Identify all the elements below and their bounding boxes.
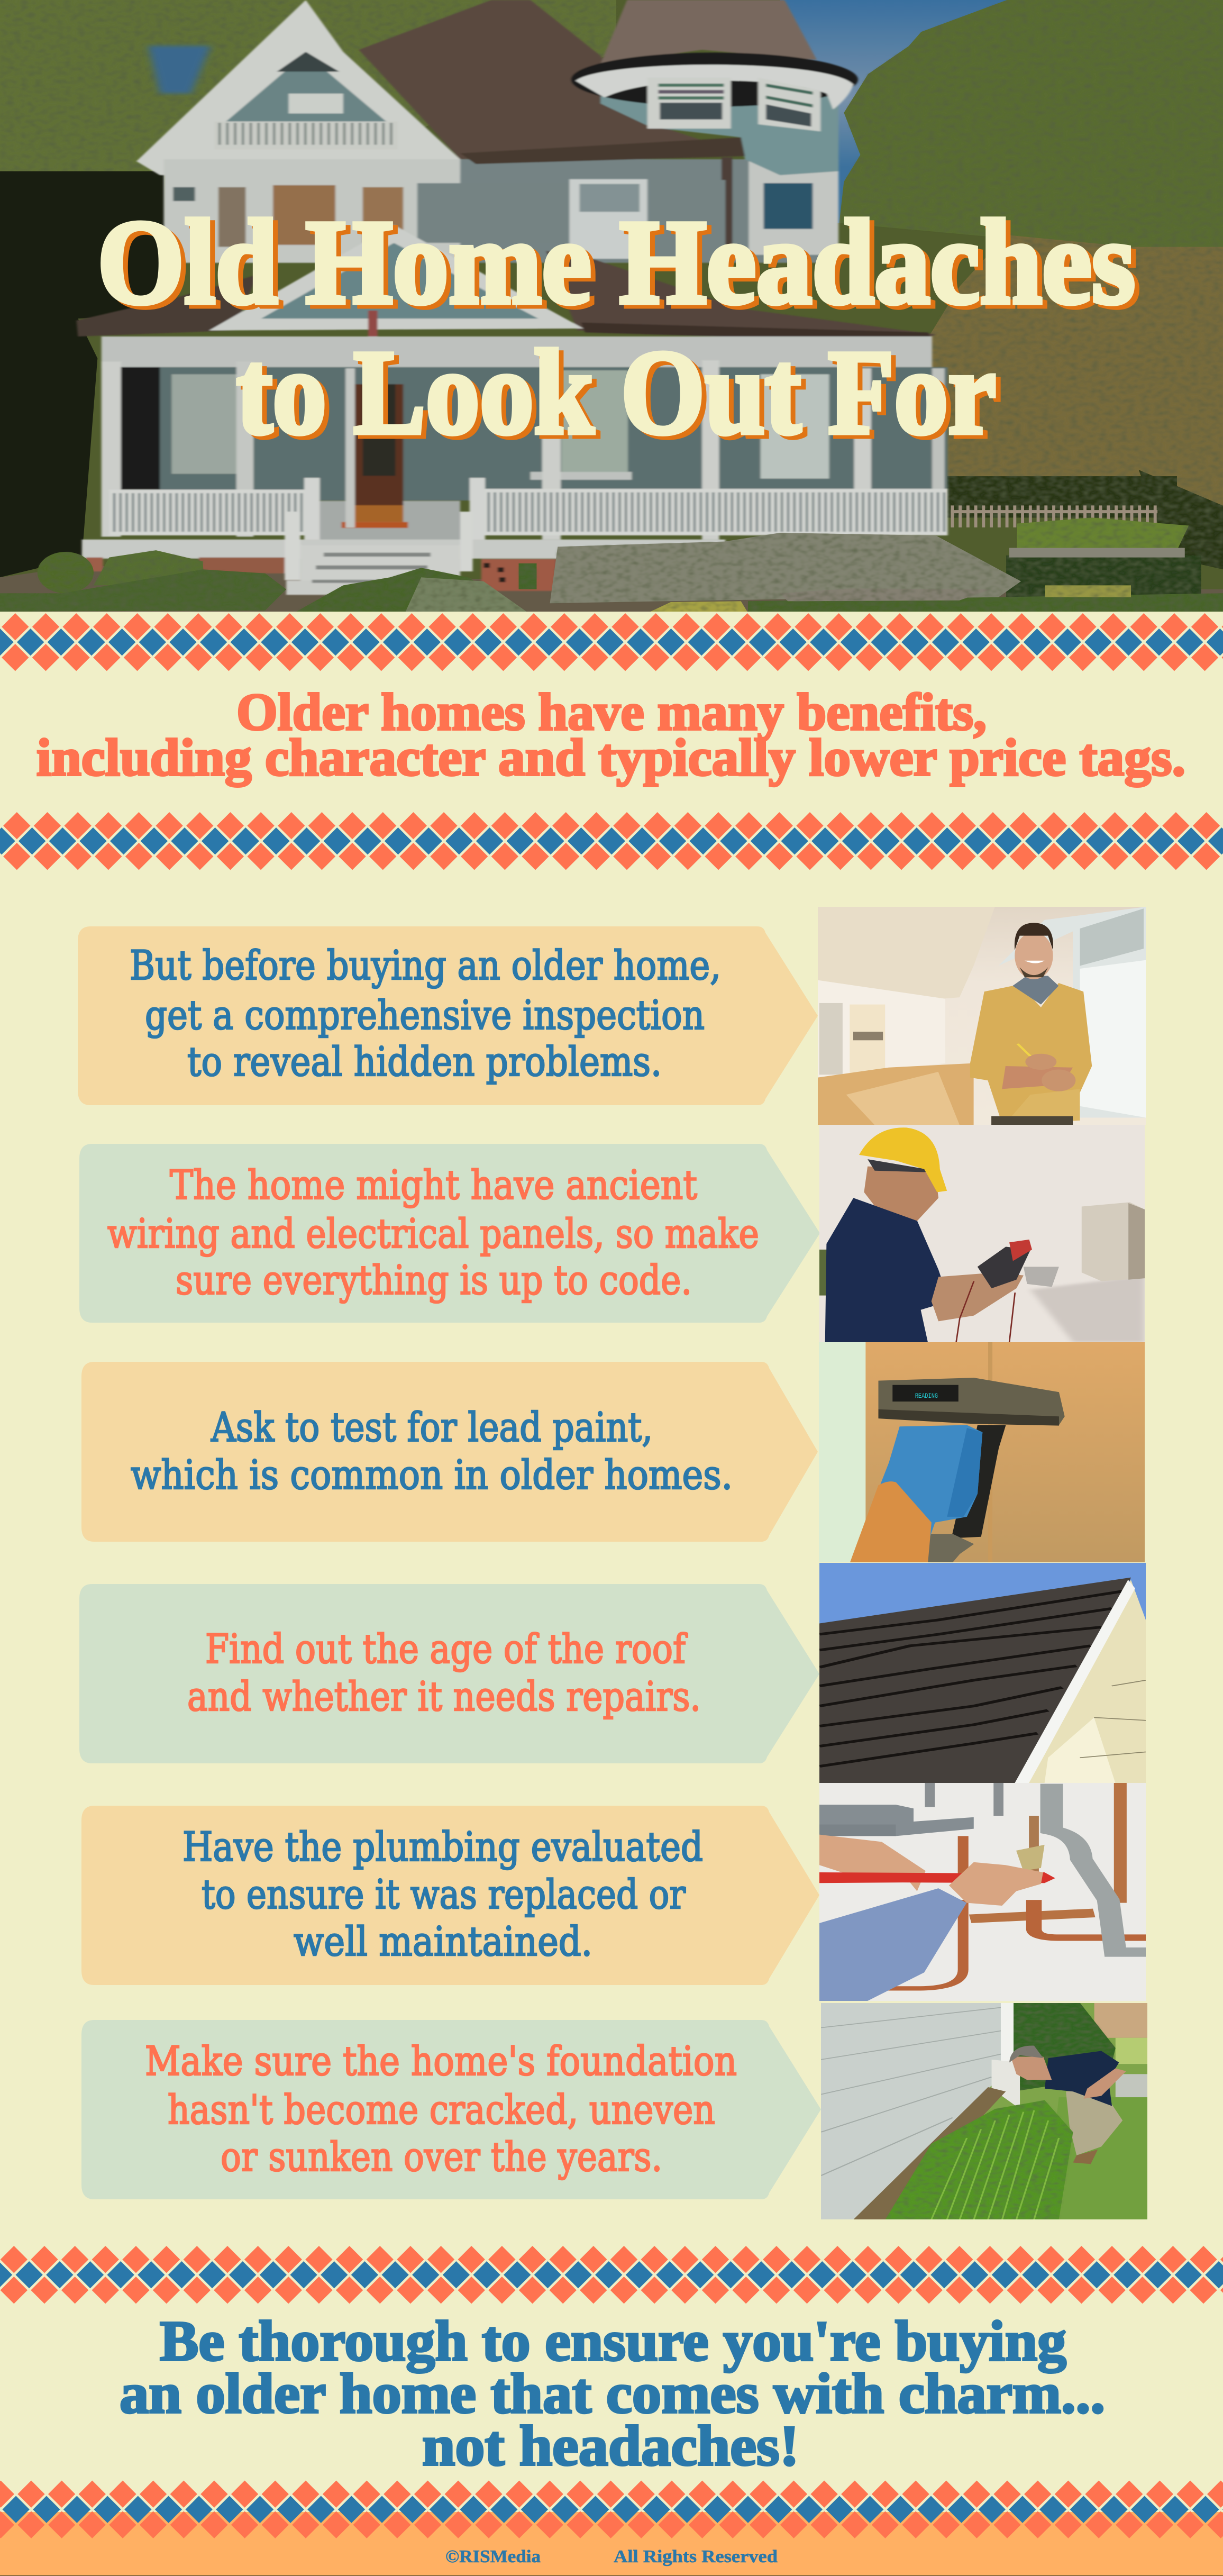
porch [102,336,932,368]
title text: to Look Out For [236,326,996,459]
panel 5: plumbing [81,1783,1146,2001]
intro text [36,682,1185,787]
diamond band 1 [0,613,1223,671]
text [107,1161,759,1304]
text: hasn't become cracked, uneven [168,2086,715,2133]
text: sure everything is up to code. [176,1257,692,1304]
panel 3: lead paint [81,1342,1145,1562]
text: wiring and electrical panels, so make [107,1210,759,1257]
diamond band 3 [0,2246,1223,2304]
fence [951,512,1157,516]
device display text: READING [915,1392,938,1400]
arrow box [78,926,818,1105]
text: or sunken over the years. [221,2133,662,2180]
text: Have the plumbing evaluated [182,1823,703,1870]
closing message: not headaches! [422,2415,799,2478]
text: Ask to test for lead paint, [211,1404,653,1451]
text [131,1404,733,1498]
photo: electrician [819,1125,1145,1342]
porch roof and gable [76,275,258,336]
title shadow: Old Home Headaches [102,199,1140,333]
text [187,1625,701,1720]
panel 1: inspection [78,907,1146,1125]
panel 2: wiring [79,1125,1145,1342]
hero photo: Victorian house [0,0,1223,612]
arrow box [81,2020,821,2199]
diamond band 4 [0,2480,1223,2538]
ground [0,566,1223,612]
text: But before buying an older home, [130,942,721,989]
title shadow: to Look Out For [241,330,1001,463]
text: to reveal hidden problems. [187,1038,662,1085]
arrow box [81,1362,818,1542]
text: get a comprehensive inspection [145,991,705,1039]
arrow box [79,1144,820,1323]
diamond band 2 [0,812,1223,870]
title [97,196,1140,463]
text: The home might have ancient [170,1161,697,1208]
photo: plumber with wrench [819,1783,1146,2001]
closing message: Be thorough to ensure you're buying [160,2310,1066,2373]
closing message: an older home that comes with charm... [120,2362,1105,2425]
title text [97,196,1135,459]
text: Make sure the home's foundation [145,2037,737,2085]
arrow box [81,1806,819,1985]
panel 4: roof [79,1563,1146,1783]
text [130,942,721,1085]
arrow box [79,1584,819,1763]
footer credits [445,2547,778,2566]
footer background [0,2512,1223,2575]
intro text: including character and typically lower price tags. [36,728,1185,787]
photo: damaged roof [819,1563,1146,1783]
photo: man inspecting foundation [821,2003,1147,2219]
text [182,1823,703,1965]
panel 6: foundation [81,2003,1147,2219]
text: which is common in older homes. [131,1451,733,1498]
text [145,2037,737,2180]
intro text: Older homes have many benefits, [236,682,987,741]
photo: lead paint tester [819,1342,1145,1562]
photo: inspector with clipboard [818,907,1146,1125]
shrubs [0,533,1131,612]
footer credits: ©RISMedia [445,2547,541,2566]
railings [109,491,308,533]
footer credits: All Rights Reserved [614,2547,778,2566]
roofs and upper storey [359,0,741,159]
text: Find out the age of the roof [205,1625,688,1672]
text: and whether it needs repairs. [187,1673,701,1720]
text: well maintained. [294,1918,592,1965]
closing message [120,2310,1105,2478]
title shadow [102,199,1140,463]
text: to ensure it was replaced or [202,1871,686,1918]
title text: Old Home Headaches [97,196,1135,329]
